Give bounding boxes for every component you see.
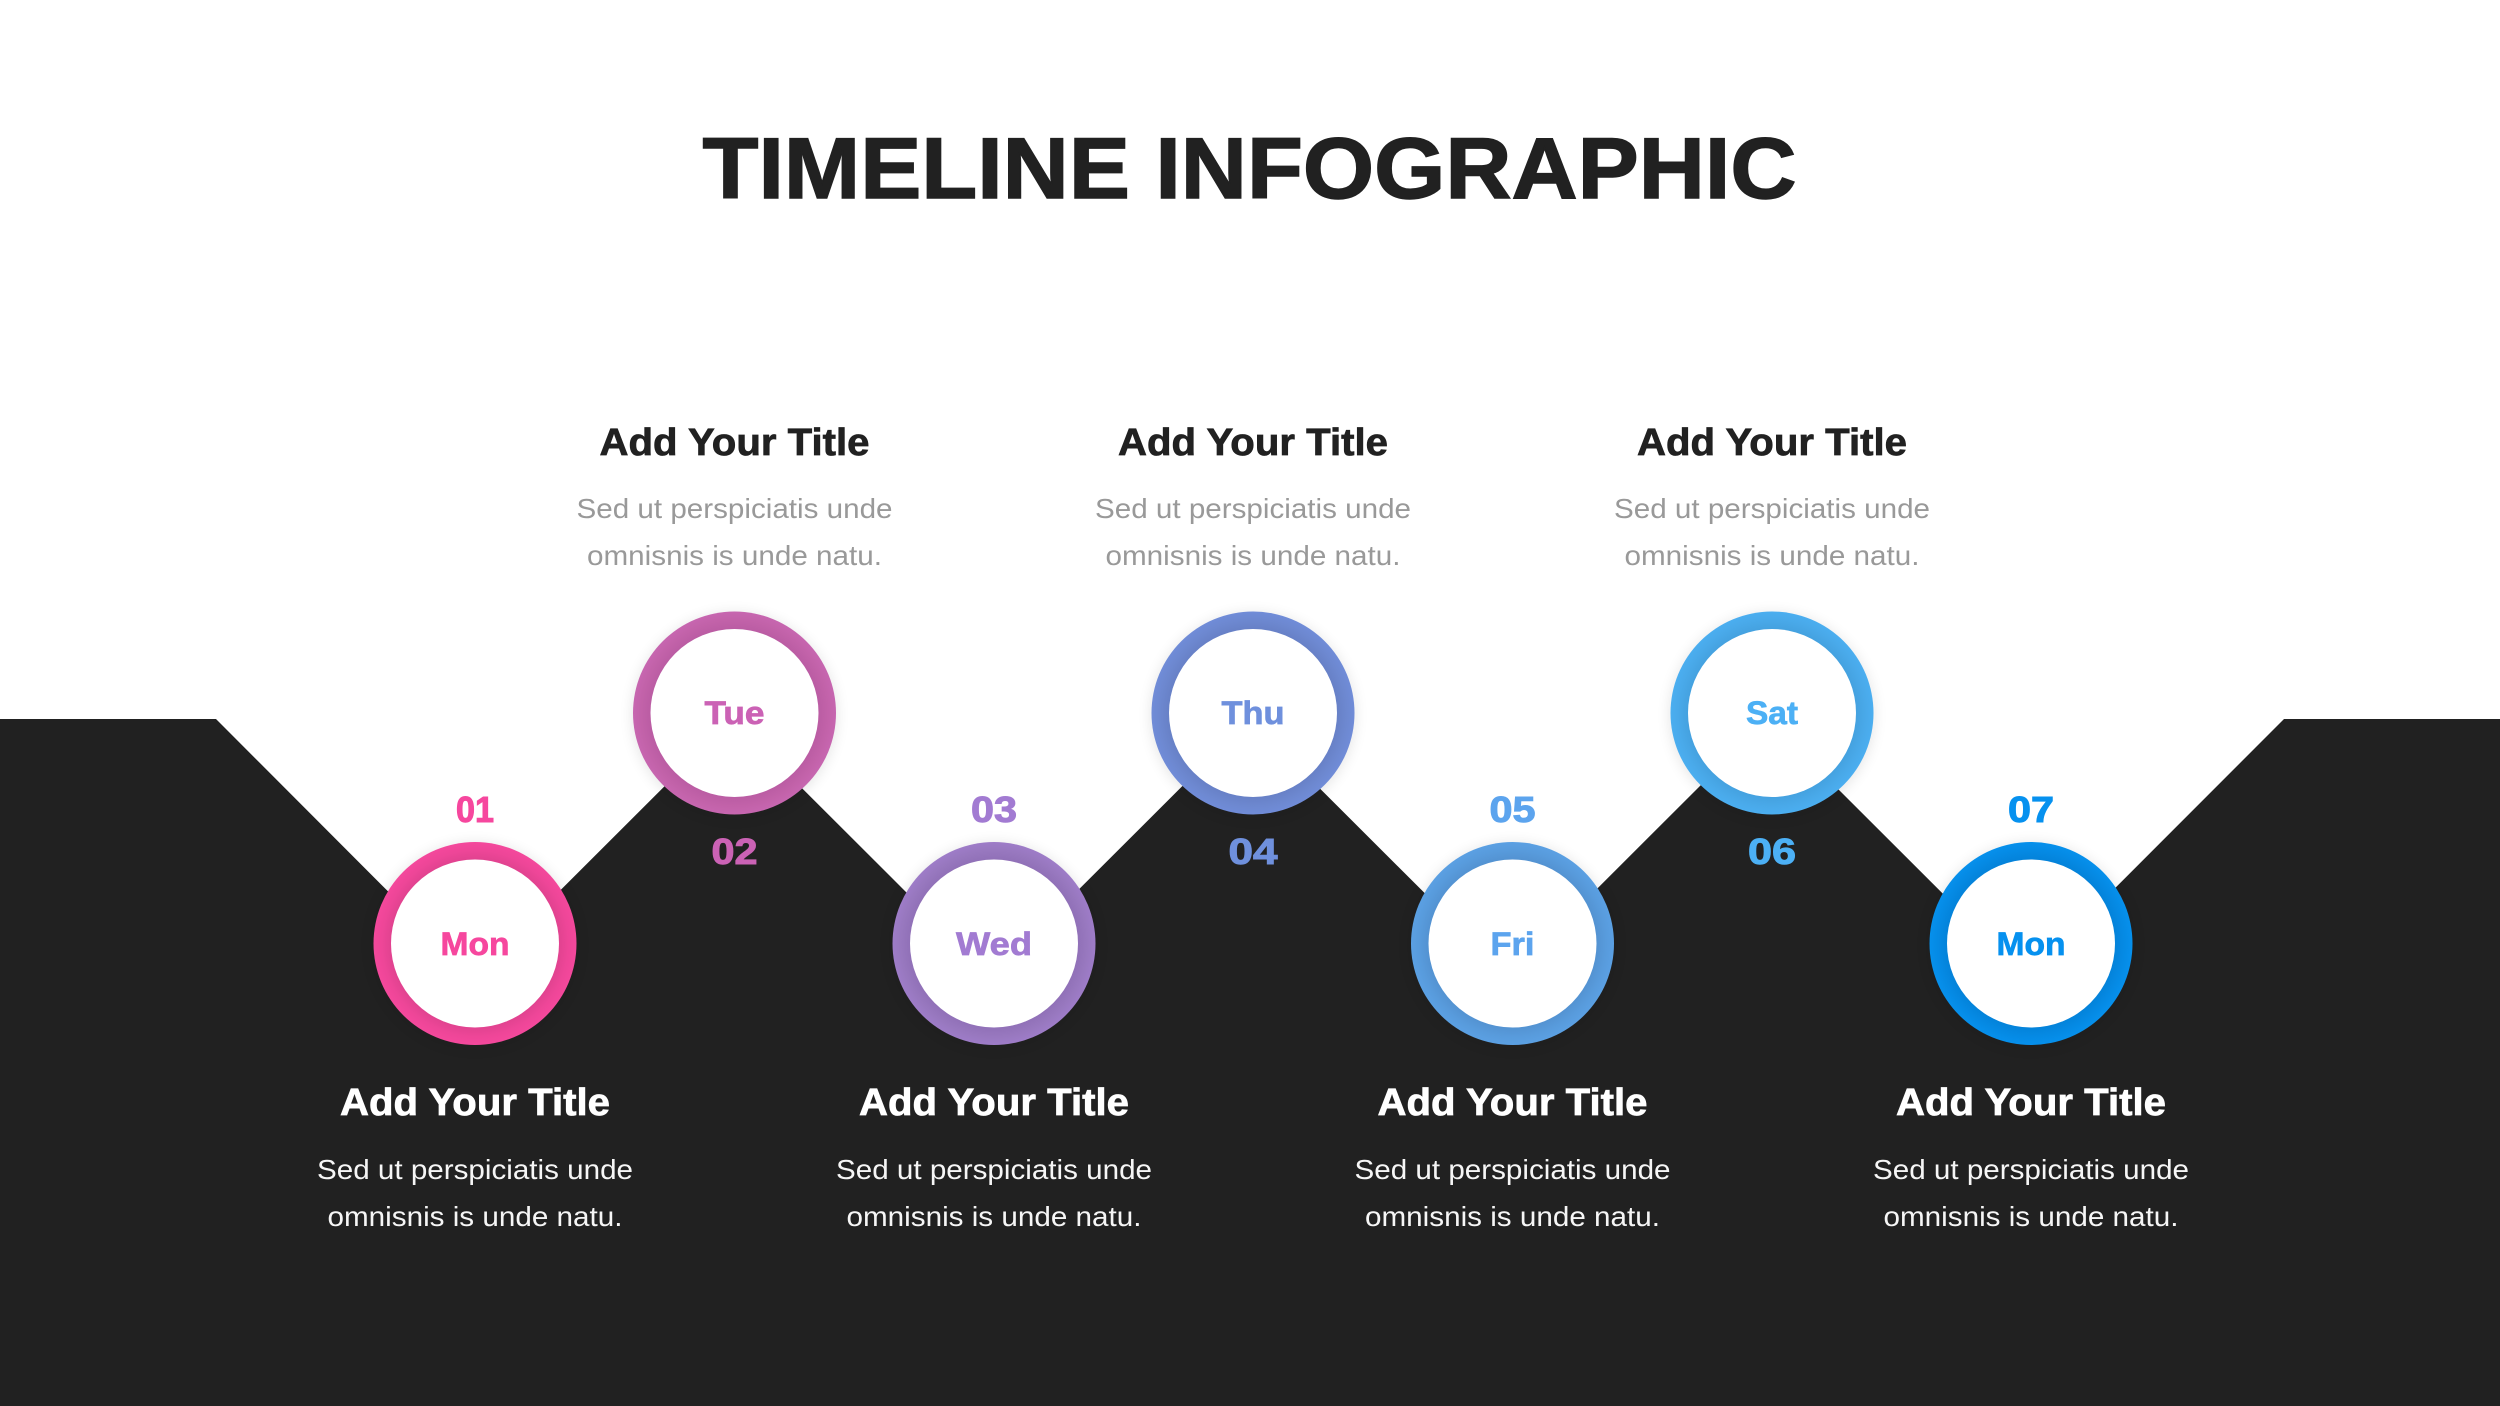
body text (1873, 1154, 2189, 1232)
number 01: 01 (456, 789, 494, 830)
body text (1614, 493, 1930, 571)
body text: Sed ut perspiciatis unde (1095, 493, 1411, 524)
step 04 (1095, 422, 1411, 872)
circle marker: Wed (892, 842, 1096, 1047)
body text (836, 1154, 1152, 1232)
body text: Sed ut perspiciatis unde (576, 493, 892, 524)
heading: Add Your Title (859, 1082, 1129, 1124)
number 07: 07 (2008, 789, 2054, 830)
circle marker: Mon: Mon (1996, 926, 2066, 962)
heading: Add Your Title (1118, 422, 1388, 464)
number 04: 04 (1228, 831, 1278, 872)
title: TIMELINE INFOGRAPHIC (702, 121, 1796, 217)
body text: omnisnis is unde natu. (587, 540, 882, 571)
body text: omnisnis is unde natu. (1106, 540, 1400, 571)
number 06: 06 (1748, 831, 1796, 872)
number 02: 02 (712, 831, 758, 872)
circle marker: Sat (1670, 612, 1874, 817)
circle marker: Mon: Mon (440, 926, 510, 962)
body text: Sed ut perspiciatis unde (1873, 1154, 2189, 1185)
circle marker: Thu (1151, 612, 1355, 817)
body text: omnisnis is unde natu. (1365, 1201, 1660, 1232)
circle marker: Mon (1929, 842, 2133, 1047)
heading: Add Your Title (600, 422, 870, 464)
number 05: 05 (1490, 789, 1536, 830)
circle marker: Wed: Wed (956, 926, 1032, 962)
heading: Add Your Title (1637, 422, 1907, 464)
body text (576, 493, 892, 571)
body text (317, 1154, 633, 1232)
step 07 (1873, 789, 2189, 1232)
step 06 (1614, 422, 1930, 872)
step 01 (317, 789, 633, 1232)
heading: Add Your Title (1896, 1082, 2166, 1124)
circle marker: Thu: Thu (1222, 695, 1284, 731)
circle marker: Tue (632, 612, 836, 817)
step 03 (836, 789, 1152, 1232)
body text: omnisnis is unde natu. (1884, 1201, 2178, 1232)
circle marker: Fri (1410, 842, 1614, 1047)
panel: dark zigzag ground (0, 719, 2500, 1406)
body text (1095, 493, 1411, 571)
step 05 (1354, 789, 1670, 1232)
body text: omnisnis is unde natu. (1624, 540, 1920, 571)
circle marker: Sat: Sat (1746, 695, 1798, 731)
body text: Sed ut perspiciatis unde (1614, 493, 1930, 524)
heading: Add Your Title (340, 1082, 610, 1124)
circle marker: Fri: Fri (1490, 926, 1534, 962)
body text: Sed ut perspiciatis unde (1354, 1154, 1670, 1185)
body text: omnisnis is unde natu. (846, 1201, 1142, 1232)
number 03: 03 (971, 789, 1017, 830)
body text: Sed ut perspiciatis unde (317, 1154, 633, 1185)
heading: Add Your Title (1378, 1082, 1648, 1124)
body text (1354, 1154, 1670, 1232)
body text: Sed ut perspiciatis unde (836, 1154, 1152, 1185)
circle marker: Mon (373, 842, 577, 1047)
step 02 (576, 422, 892, 872)
body text: omnisnis is unde natu. (328, 1201, 622, 1232)
circle marker: Tue: Tue (704, 695, 764, 731)
